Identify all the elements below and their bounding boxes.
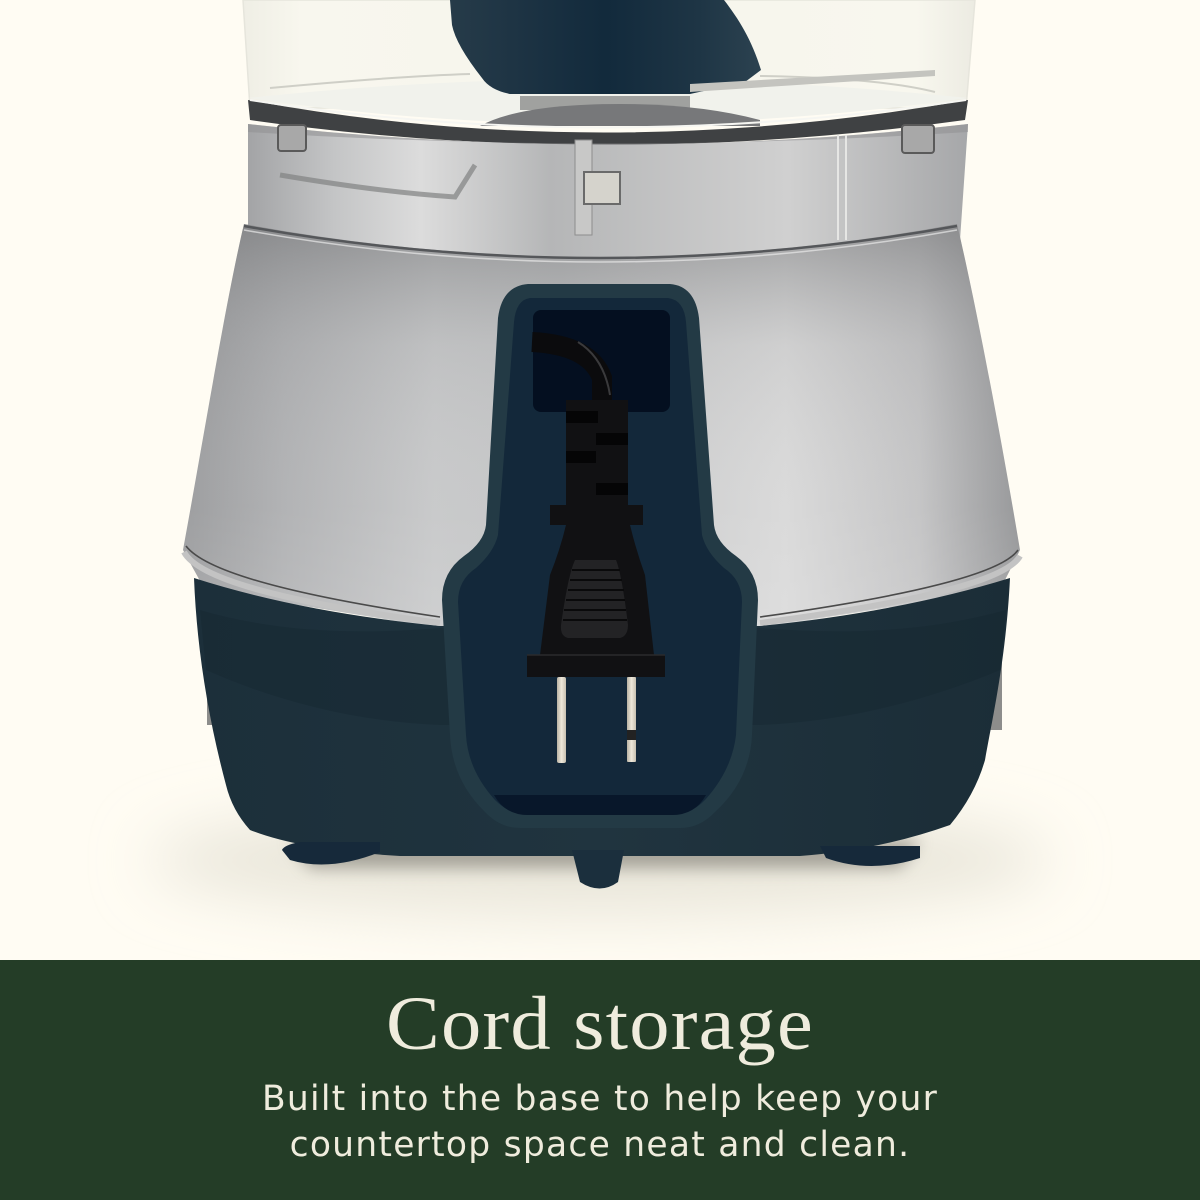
heading: Cord storage [386, 982, 814, 1066]
silver collar [248, 124, 968, 262]
counter shadow [150, 805, 1050, 915]
lower slot shadow [494, 795, 706, 815]
description [262, 1079, 938, 1165]
housing top shading [183, 224, 1020, 628]
trim line [244, 226, 957, 258]
bowl floor [248, 79, 968, 124]
opening [533, 310, 670, 412]
cord [532, 342, 602, 405]
dark base [194, 578, 1010, 856]
silver motor housing [183, 224, 1020, 628]
plug [527, 400, 665, 677]
clear bowl [243, 0, 975, 145]
product illustration: food processor base [168, 0, 1032, 928]
side tabs [207, 640, 221, 725]
description: Built into the base to help keep your [262, 1079, 938, 1119]
hub [520, 96, 690, 110]
prongs [557, 677, 566, 763]
base darker band [200, 610, 1006, 725]
caption band [0, 960, 1200, 1200]
grip pad [561, 560, 628, 638]
collar recess [280, 165, 475, 197]
blade [690, 70, 935, 92]
description: countertop space neat and clean. [290, 1125, 910, 1165]
feet [282, 842, 920, 888]
centre tab [575, 140, 592, 235]
cord storage recess [442, 284, 758, 828]
metal trim ring [184, 552, 1020, 623]
clips [278, 125, 306, 151]
feed chute pusher [450, 0, 761, 94]
strain relief slots [566, 411, 628, 495]
rim [248, 100, 968, 145]
